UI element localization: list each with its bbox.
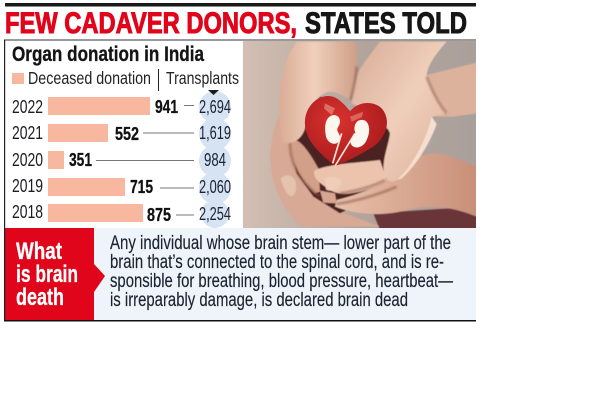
callout: red label: death <box>16 284 64 311</box>
row 2020: 984 <box>204 150 226 170</box>
definition text: brain that’s connected to the spinal cord, and is re- <box>110 252 444 273</box>
headline: FEW CADAVER DONORS, <box>5 7 297 40</box>
definition text: Any individual whose brain stem— lower part of the <box>110 233 451 254</box>
callout: red label: What <box>16 238 62 265</box>
transplant circles column <box>199 91 231 228</box>
row 2021 <box>12 123 231 144</box>
row 2018: 2,254 <box>199 204 231 224</box>
photo: hands holding a heart with kidneys <box>243 41 477 230</box>
callout: red label: is brain <box>16 261 78 288</box>
row 2019 <box>12 176 231 197</box>
row 2019: 715 <box>130 176 153 197</box>
row 2018 <box>12 202 231 225</box>
definition text <box>110 233 453 311</box>
row 2018: 2018 <box>12 202 43 222</box>
callout: red label <box>5 228 105 320</box>
row 2020: 2020 <box>12 150 43 170</box>
legend: Transplants <box>166 68 239 88</box>
row 2021: 2021 <box>12 123 43 143</box>
legend: Deceased donation <box>28 68 151 88</box>
definition text: sponsible for breathing, blood pressure, heartbeat— <box>110 271 453 292</box>
row 2020 <box>12 149 226 170</box>
row 2021: 1,619 <box>199 123 231 143</box>
row 2022 <box>12 96 231 117</box>
headline: STATES TOLD <box>305 7 467 40</box>
panel: what is brain death definition <box>5 228 476 320</box>
row 2019: 2,060 <box>199 177 231 197</box>
heart <box>305 96 387 166</box>
row 2022: 2,694 <box>199 97 231 117</box>
legend <box>12 68 239 91</box>
row 2022: 2022 <box>12 97 43 117</box>
row 2020: 351 <box>69 149 92 170</box>
definition text: is irreparably damage, is declared brain dead <box>110 290 408 311</box>
icon: down triangle <box>208 90 219 95</box>
top rule <box>5 3 476 6</box>
panel: organ donation chart <box>5 40 243 228</box>
row 2018: 875 <box>147 204 171 225</box>
row 2019: 2019 <box>12 176 43 196</box>
frame lines <box>4 40 476 322</box>
row 2022: 941 <box>155 96 178 117</box>
row 2021: 552 <box>115 123 139 144</box>
chart title: Organ donation in India <box>12 43 204 66</box>
finger creases <box>290 67 447 204</box>
